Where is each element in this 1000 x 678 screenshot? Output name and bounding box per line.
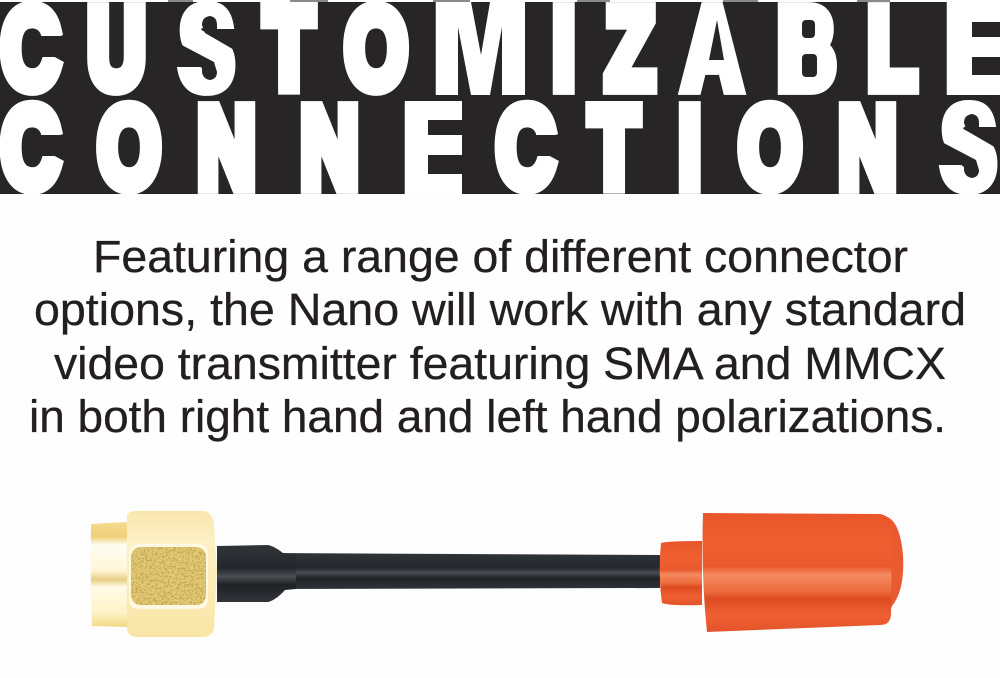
body paragraph: [29, 231, 966, 442]
letter fill correction, line 1: [795, 2, 1000, 95]
knurled flat: [129, 544, 208, 609]
black cable: [217, 545, 660, 602]
title banner: [0, 0, 1000, 211]
letter counters correction, line 2: [38, 114, 1000, 178]
antenna product illustration: [91, 511, 903, 637]
letter counters correction, line 1: [38, 16, 1000, 80]
cap collar: [660, 541, 702, 605]
gold SMA connector: [91, 511, 217, 637]
body line 4: in both right hand and left hand polarizations.: [29, 391, 946, 442]
heat shrink: [217, 545, 296, 602]
top edge image remnants: [168, 0, 890, 2]
title line 2: CONNECTIONS: [2, 84, 995, 211]
cap end: [885, 516, 903, 625]
banner band: [0, 2, 1000, 194]
letter E body correction: [405, 101, 462, 194]
letter M shape correction: [436, 2, 525, 95]
body line 2: options, the Nano will work with any standard: [34, 284, 966, 335]
red antenna cap: [660, 513, 903, 632]
connector collar: [91, 522, 127, 627]
body line 3: video transmitter featuring SMA and MMCX: [54, 338, 946, 389]
body line 1: Featuring a range of different connector: [93, 231, 908, 282]
hex nut: [127, 511, 217, 637]
cap body: [702, 513, 892, 632]
cable core: [270, 553, 660, 589]
